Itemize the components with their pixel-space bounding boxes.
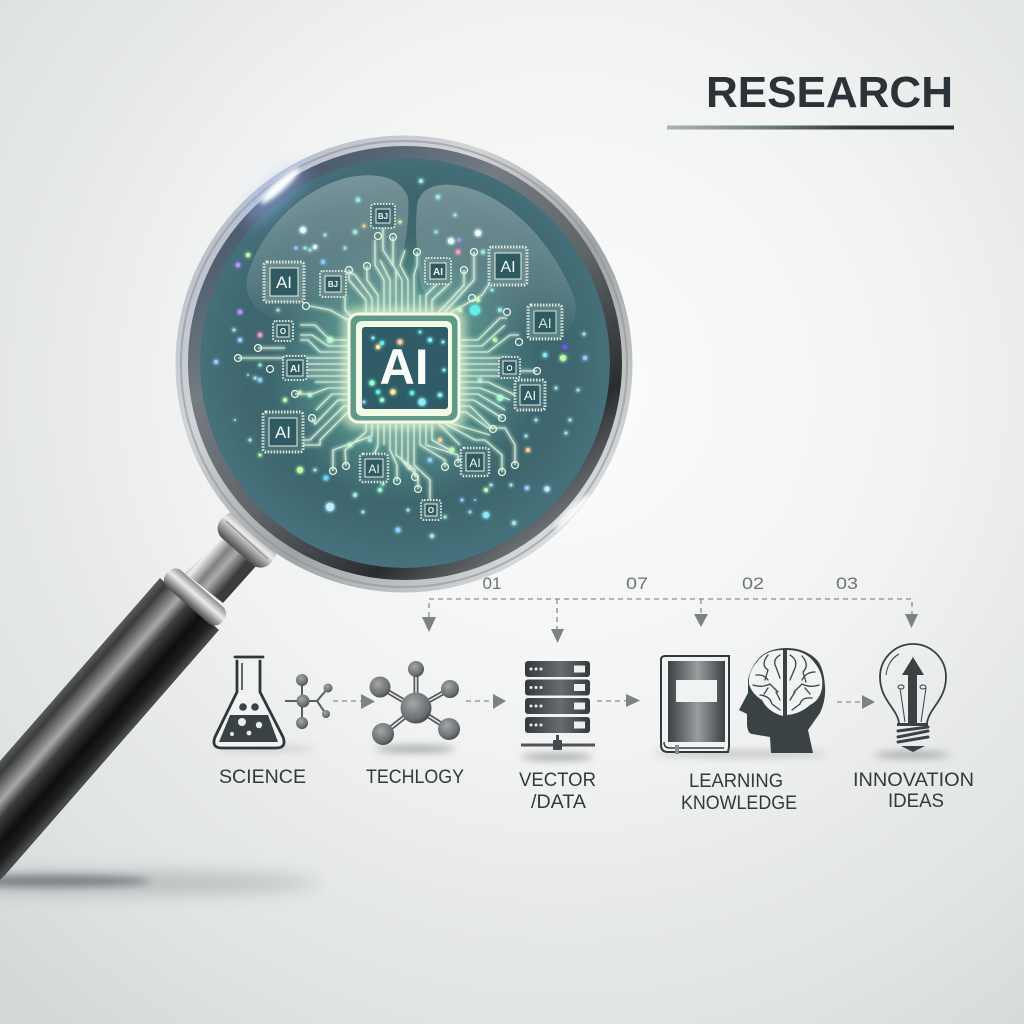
label: vector data: /DATA [531,792,586,813]
chip: AI [275,423,291,442]
arrow: technology to vector data [466,694,506,709]
chip sparkles [362,330,446,406]
chip: AI [433,267,443,278]
label: innovation ideas: INNOVATION [853,770,974,791]
lens frame [176,136,632,592]
icon: network molecule [370,661,460,745]
label: vector data: VECTOR [519,770,596,791]
chip [515,380,545,410]
lens [200,158,610,568]
metal neck [185,535,257,603]
label: techlogy: TECHLOGY [366,767,464,788]
trace pads [234,232,540,492]
label: innovation ideas: IDEAS [888,791,944,812]
chip [263,412,303,452]
icon: server stack [521,661,595,750]
chip: BJ [378,212,388,221]
arrow: data to learning [597,694,640,707]
top dashed connector with step numbers: 02 [742,574,764,593]
chip: Al [290,364,300,375]
chip: AI [368,462,380,476]
arrow: science to technology [333,694,375,709]
chip [371,204,395,228]
icon: flask [214,657,284,748]
title: RESEARCH [667,68,954,130]
icon: light bulb [880,644,946,752]
chip: O [506,364,513,373]
label: learning knowledge: LEARNING [689,771,783,792]
chip [360,454,388,482]
chip [264,262,304,302]
lens reflection lobes [247,175,576,338]
ferrule [160,564,230,630]
chip: O [280,327,286,336]
chip: AI [524,388,536,403]
icon shadows [215,746,950,760]
chip [499,357,520,378]
satellite chips [263,204,562,520]
chip [425,258,451,284]
black grip [0,578,219,880]
magnifying glass [0,136,632,880]
icon: small molecule [285,674,332,729]
top dashed connector with step numbers: 03 [836,574,858,593]
title: RESEARCH: RESEARCH [706,68,953,117]
label: science: SCIENCE [219,767,306,788]
chip [528,305,562,339]
handle shadow [0,873,320,893]
top dashed connector with step numbers: 01 [482,574,502,593]
label: innovation ideas [853,770,974,812]
top dashed connector with step numbers: 07 [626,574,648,593]
central AI chip: AI [380,339,428,395]
label: learning knowledge [681,771,797,814]
particle field [214,179,587,538]
top dashed connector with step numbers [422,574,918,643]
central AI chip [342,307,466,429]
chip: AI [276,273,292,292]
chip [320,271,346,297]
chip [421,500,441,520]
brain [749,650,822,716]
arrow: learning to innovation [837,695,875,709]
chip: BJ [328,280,338,289]
chip: AI [538,315,552,331]
collar [212,507,282,573]
handle [0,507,282,880]
circuit halo [284,247,525,488]
chip: O [428,506,434,515]
chip: AI [500,259,516,276]
chip: AI [469,456,481,470]
icon: book [661,656,729,754]
lens glare [237,159,591,531]
chip [283,356,307,380]
label: vector data [519,770,596,813]
label: learning knowledge: KNOWLEDGE [681,793,797,814]
circuit traces [238,226,537,500]
icon: head with brain [739,648,825,753]
chip [489,247,527,285]
chip [273,321,293,341]
chip [461,448,489,476]
